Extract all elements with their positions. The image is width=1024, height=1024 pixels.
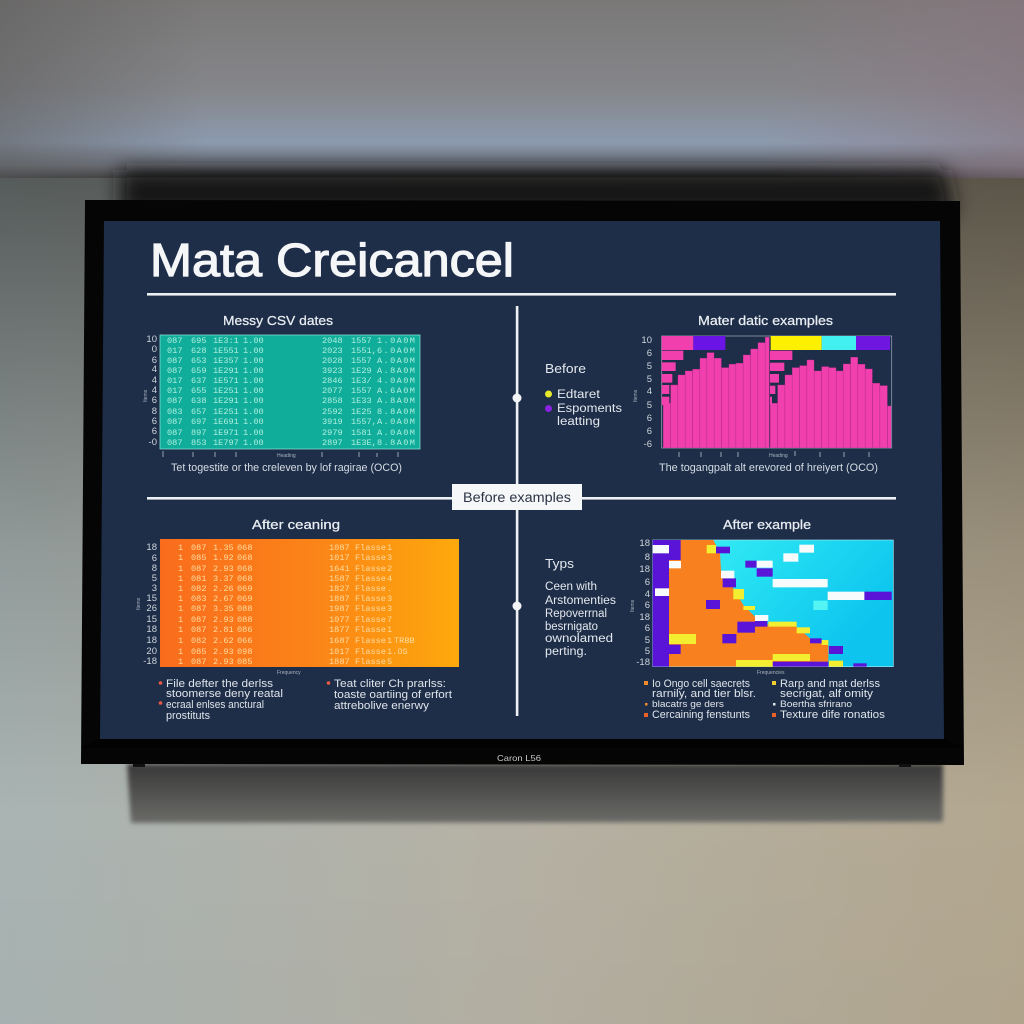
- orange table rows: 2.93: [213, 564, 234, 574]
- orange table rows: .: [387, 584, 392, 594]
- bar chart y axis: Items: [633, 389, 639, 402]
- orange table y axis: Items: [136, 597, 142, 610]
- teal table rows: 1E25: [351, 407, 372, 417]
- types paragraph: Repoverrnal: [545, 608, 607, 620]
- caption: before chart: The togangpalt alt erevored of hreiyert (OCO): [659, 462, 878, 474]
- teal table rows: 087: [167, 417, 182, 427]
- bar chart y axis: 6: [647, 426, 652, 437]
- orange table rows: 1887: [329, 594, 350, 604]
- heatmap y axis: 5: [645, 635, 650, 646]
- orange table rows: 1887: [329, 657, 350, 667]
- bar chart y axis: 6: [647, 348, 652, 359]
- bullets: after cleaning right: [327, 678, 452, 712]
- orange table rows: 3: [387, 594, 392, 604]
- teal table y axis: 6: [152, 426, 157, 437]
- teal table y axis: [143, 334, 157, 448]
- orange table rows: 5: [387, 657, 392, 667]
- ceiling: [0, 0, 1024, 178]
- orange table rows: 1: [178, 574, 183, 584]
- orange table y axis: 18: [146, 635, 157, 646]
- orange table rows: 1077: [329, 615, 350, 625]
- bullets: after example right: Rarp and mat derlss: [780, 678, 881, 690]
- types paragraph: perting.: [545, 646, 587, 658]
- teal table y axis: 4: [152, 364, 157, 375]
- orange table y axis: [136, 542, 157, 667]
- teal table y axis: 4: [152, 375, 157, 386]
- teal table rows: 1E251: [213, 407, 239, 417]
- orange table rows: Flasse: [355, 604, 386, 614]
- teal table rows: 1E971: [213, 428, 239, 438]
- orange table rows: 1.92: [213, 553, 234, 563]
- teal table rows: [167, 336, 416, 448]
- teal table rows: A.0A0M: [377, 417, 416, 427]
- teal table rows: 6.0A0M: [377, 346, 416, 356]
- orange table rows: 1687: [329, 636, 350, 646]
- panel: messy CSV table: [143, 313, 420, 474]
- orange table rows: 1: [178, 553, 183, 563]
- heatmap y axis: 18: [639, 612, 650, 623]
- teal table rows: 4.0A0M: [377, 376, 416, 386]
- monitor bezel: [81, 200, 964, 767]
- orange table rows: Flasse: [355, 564, 386, 574]
- orange table rows: 1: [387, 625, 392, 635]
- caption: messy CSV: Tet togestite or the creleven by lof ragirae (OCO): [171, 462, 402, 474]
- orange table x axis label: Frequency: [277, 670, 301, 676]
- teal table rows: 637: [191, 376, 206, 386]
- teal table background: [160, 335, 420, 449]
- orange table rows: 085: [191, 647, 206, 657]
- teal table rows: 628: [191, 346, 206, 356]
- teal table rows: 3919: [322, 417, 343, 427]
- orange table rows: 2.67: [213, 594, 234, 604]
- orange table rows: 068: [237, 564, 252, 574]
- teal table rows: 2897: [322, 438, 343, 448]
- teal table rows: 1.00: [243, 407, 264, 417]
- teal table rows: 087: [167, 356, 182, 366]
- bullets: after example left: rarnily, and tier blsr.: [652, 688, 756, 700]
- teal table rows: 638: [191, 396, 206, 406]
- heatmap y axis: 6: [645, 600, 650, 611]
- orange table y axis: 15: [146, 593, 157, 604]
- heatmap y axis: 8: [645, 552, 650, 563]
- teal table y axis: 8: [152, 406, 157, 417]
- teal table rows: 657: [191, 407, 206, 417]
- orange table rows: 081: [191, 574, 206, 584]
- bar chart x axis: Heading: [769, 453, 788, 459]
- timeline dot lower: [512, 602, 522, 610]
- types paragraph: [545, 581, 616, 658]
- heatmap y axis: 6: [645, 577, 650, 588]
- panel: before bar chart: [633, 313, 892, 474]
- teal table rows: 1557: [351, 336, 372, 346]
- teal table x axis: Heading: [277, 453, 296, 459]
- screen panel: [100, 221, 944, 739]
- teal table rows: 897: [191, 428, 206, 438]
- teal table rows: 659: [191, 366, 206, 376]
- teal table rows: 1E29: [351, 366, 372, 376]
- orange table rows: 1: [178, 564, 183, 574]
- orange table y axis: 18: [146, 624, 157, 635]
- teal table rows: 697: [191, 417, 206, 427]
- orange table rows: 1: [178, 594, 183, 604]
- teal table rows: 1.00: [243, 346, 264, 356]
- orange table rows: 066: [237, 636, 252, 646]
- bullets: after example left: Cercaining fenstunts: [652, 709, 750, 721]
- teal table y axis: 0: [152, 344, 157, 355]
- title rule: [147, 293, 896, 296]
- types paragraph: Arstomenties: [545, 595, 616, 607]
- heatmap y axis: 5: [645, 646, 650, 657]
- heatmap y axis: 4: [645, 589, 650, 600]
- bullets: after cleaning left: ecraal enlses anctural: [166, 699, 264, 711]
- orange table rows: 1017: [329, 553, 350, 563]
- teal table rows: 087: [167, 336, 182, 346]
- teal table rows: 1E797: [213, 438, 239, 448]
- bar chart y axis: 5: [647, 400, 652, 411]
- teal table rows: 1E691: [213, 417, 239, 427]
- teal table rows: 2979: [322, 428, 343, 438]
- orange table rows: 1: [178, 604, 183, 614]
- teal table rows: 2048: [322, 336, 343, 346]
- types paragraph: Ceen with: [545, 581, 597, 593]
- teal table rows: 1.00: [243, 396, 264, 406]
- orange table rows: 085: [191, 553, 206, 563]
- orange table rows: 1017: [329, 647, 350, 657]
- teal table rows: A.8A0M: [377, 366, 416, 376]
- heatmap y axis: [630, 538, 650, 668]
- bullets: after example right: [772, 678, 886, 721]
- bullets: after example left: blacatrs ge ders: [652, 699, 725, 709]
- orange table y axis: 5: [152, 573, 157, 584]
- teal table rows: 1.00: [243, 428, 264, 438]
- teal table rows: 1.00: [243, 417, 264, 427]
- orange table rows: 088: [237, 604, 252, 614]
- bullets: after cleaning right: Teat cliter Ch prarlss:: [334, 678, 446, 690]
- teal table rows: 2077: [322, 386, 343, 396]
- bullets: after example left: Io Ongo cell saecrets: [652, 678, 750, 690]
- teal table rows: 087: [167, 428, 182, 438]
- panel: after cleaning table: [136, 517, 459, 722]
- teal table rows: 017: [167, 386, 182, 396]
- heatmap y axis: 18: [639, 564, 650, 575]
- teal table rows: 1557: [351, 386, 372, 396]
- orange table rows: 1: [178, 625, 183, 635]
- bullets: after cleaning right: toaste oartiing of erfort: [334, 689, 452, 701]
- orange table rows: 087: [191, 657, 206, 667]
- orange table y axis: 3: [152, 583, 157, 594]
- teal table rows: 1E251: [213, 386, 239, 396]
- heading: before chart: Mater datic examples: [698, 313, 834, 328]
- types paragraph: besrnigato: [545, 621, 598, 633]
- title: Mata Creicancel: [150, 234, 514, 286]
- teal table rows: 1E291: [213, 396, 239, 406]
- teal table rows: 1557,: [351, 417, 377, 427]
- bar chart y axis: 5: [647, 361, 652, 372]
- bullets: after example right: Boertha sfrirano: [780, 699, 852, 709]
- orange table y axis: 20: [146, 646, 157, 657]
- orange table background: [160, 539, 459, 667]
- orange table rows: 1827: [329, 584, 350, 594]
- teal table y axis: 10: [146, 334, 157, 345]
- orange table rows: 087: [191, 615, 206, 625]
- bullets: after example left: [644, 678, 756, 721]
- orange table rows: 3: [387, 553, 392, 563]
- teal table rows: 2858: [322, 396, 343, 406]
- legend item: yellow: Edtaret: [557, 389, 601, 401]
- teal table rows: 1.00: [243, 336, 264, 346]
- orange table rows: 1877: [329, 625, 350, 635]
- teal table rows: 1E33: [351, 396, 372, 406]
- orange table rows: TRBB: [394, 636, 415, 646]
- teal table rows: 083: [167, 407, 182, 417]
- teal table y axis: 6: [152, 395, 157, 406]
- teal table rows: 653: [191, 356, 206, 366]
- teal table rows: 1E291: [213, 366, 239, 376]
- orange table rows: 3.35: [213, 604, 234, 614]
- orange table rows: Flasse: [355, 615, 386, 625]
- teal table rows: 1.00: [243, 376, 264, 386]
- bar chart x axis: [679, 451, 869, 459]
- bullets: after cleaning right: attrebolive enerwy: [334, 700, 430, 712]
- legend item: purple: Espoments: [557, 403, 622, 415]
- teal table rows: 1.0A0M: [377, 336, 416, 346]
- heatmap y axis: -18: [636, 657, 650, 668]
- orange table rows: 068: [237, 543, 252, 553]
- orange table y axis: 15: [146, 614, 157, 625]
- orange table rows: 1.OS: [387, 647, 408, 657]
- teal table rows: 1E551: [213, 346, 239, 356]
- teal table rows: 2592: [322, 407, 343, 417]
- types paragraph: ownolamed: [545, 633, 613, 645]
- teal table rows: 1557: [351, 356, 372, 366]
- orange table rows: 068: [237, 553, 252, 563]
- teal table rows: A.0A0M: [377, 428, 416, 438]
- teal table rows: A.0A0M: [377, 356, 416, 366]
- orange table rows: Flasse: [355, 594, 386, 604]
- orange table rows: Flasse: [355, 553, 386, 563]
- orange table rows: 2: [387, 564, 392, 574]
- orange table rows: 069: [237, 584, 252, 594]
- shadow below screen: [127, 764, 943, 823]
- heatmap y axis: 18: [639, 538, 650, 549]
- heading: messy CSV: Messy CSV dates: [223, 313, 334, 328]
- bullets: after cleaning left: prostituts: [166, 710, 210, 722]
- orange table rows: 087: [191, 625, 206, 635]
- heatmap y axis: Items: [630, 599, 636, 612]
- teal table rows: 1.00: [243, 366, 264, 376]
- orange table rows: 1: [178, 615, 183, 625]
- teal table rows: 1E3/: [351, 376, 372, 386]
- teal table rows: 1.00: [243, 386, 264, 396]
- orange table rows: 1641: [329, 564, 350, 574]
- orange table rows: 087: [191, 564, 206, 574]
- heatmap: [653, 540, 893, 667]
- teal table rows: 1E3E,: [351, 438, 377, 448]
- teal table rows: 087: [167, 438, 182, 448]
- orange table y axis: 26: [146, 603, 157, 614]
- teal table rows: 1581: [351, 428, 372, 438]
- teal table rows: 1.00: [243, 438, 264, 448]
- orange table rows: 1: [178, 543, 183, 553]
- orange table rows: 2.81: [213, 625, 234, 635]
- teal table rows: 2846: [322, 376, 343, 386]
- teal table y axis: 6: [152, 416, 157, 427]
- teal table y axis: 6: [152, 355, 157, 366]
- teal table y axis: 4: [152, 385, 157, 396]
- quadrant dividers: [147, 306, 896, 716]
- bar chart: [662, 336, 892, 448]
- bar chart y axis: 10: [641, 335, 652, 346]
- orange table rows: 1: [178, 647, 183, 657]
- center label: [452, 484, 582, 510]
- orange table rows: Flasse: [355, 625, 386, 635]
- bar chart y axis: -6: [644, 439, 652, 450]
- legend item: purple: leatting: [557, 416, 600, 428]
- teal table rows: 1E571: [213, 376, 239, 386]
- teal table rows: 087: [167, 396, 182, 406]
- orange table rows: 1: [178, 584, 183, 594]
- teal table rows: 853: [191, 438, 206, 448]
- panel: after heatmap: [630, 517, 893, 721]
- heading: types: Typs: [545, 557, 574, 571]
- orange table rows: Flasse: [355, 574, 386, 584]
- teal table rows: 017: [167, 376, 182, 386]
- orange table rows: 7: [387, 615, 392, 625]
- teal table rows: 1E357: [213, 356, 239, 366]
- teal table y axis: Items: [143, 389, 149, 402]
- bar chart y axis: 5: [647, 374, 652, 385]
- bullets: after cleaning left: [159, 678, 283, 722]
- legend item: purple: [545, 403, 622, 428]
- heatmap y axis: 6: [645, 623, 650, 634]
- teal table rows: 8.8A0M: [377, 438, 416, 448]
- orange table rows: 2.93: [213, 647, 234, 657]
- orange table rows: 1987: [329, 604, 350, 614]
- orange table rows: 068: [237, 574, 252, 584]
- orange table rows: Flasse: [355, 657, 386, 667]
- teal table rows: 3923: [322, 366, 343, 376]
- heading: after cleaning: After ceaning: [252, 517, 340, 532]
- orange table rows: Flasse: [355, 636, 386, 646]
- heatmap x axis label: Frequencies: [757, 670, 785, 676]
- orange table rows: 3: [387, 604, 392, 614]
- bar chart y axis: 6: [647, 413, 652, 424]
- teal table rows: 087: [167, 366, 182, 376]
- orange table rows: 1: [178, 636, 183, 646]
- teal table rows: 1E3:1: [213, 336, 239, 346]
- bullets: after example right: Texture dife ronatios: [780, 709, 886, 721]
- orange table rows: 069: [237, 594, 252, 604]
- panel: before legend: [545, 362, 622, 428]
- teal table rows: 655: [191, 386, 206, 396]
- orange table rows: 1.35: [213, 543, 234, 553]
- bullets: after cleaning left: stoomerse deny reatal: [166, 688, 283, 700]
- bar chart y axis: [633, 335, 652, 450]
- orange table y axis: 8: [152, 563, 157, 574]
- orange table y axis: -18: [143, 656, 157, 667]
- teal table x axis: [163, 451, 398, 459]
- orange table rows: 1: [178, 657, 183, 667]
- orange table rows: 1587: [329, 574, 350, 584]
- orange table rows: 2.26: [213, 584, 234, 594]
- orange table rows: Flasse: [355, 647, 386, 657]
- timeline dot upper: [512, 394, 522, 402]
- heading: after example: After example: [723, 517, 811, 532]
- orange table rows: 085: [237, 657, 252, 667]
- orange table rows: 087: [191, 604, 206, 614]
- orange table rows: 3.37: [213, 574, 234, 584]
- orange table rows: 1: [387, 636, 392, 646]
- orange table rows: 082: [191, 584, 206, 594]
- orange table y axis: 18: [146, 542, 157, 553]
- shadow above screen: [120, 170, 955, 215]
- bullets: after cleaning left: File defter the derlss: [166, 678, 274, 690]
- bullets: after example right: secrigat, alf omity: [780, 688, 874, 700]
- teal table rows: A.8A0M: [377, 396, 416, 406]
- orange table rows: 2.62: [213, 636, 234, 646]
- bar chart y axis: 4: [647, 386, 652, 397]
- orange table rows: 083: [191, 594, 206, 604]
- orange table rows: 1087: [329, 543, 350, 553]
- orange table rows: [178, 543, 415, 667]
- orange table rows: 082: [191, 636, 206, 646]
- orange table rows: 086: [237, 625, 252, 635]
- orange table rows: 2.93: [213, 615, 234, 625]
- orange table y axis: 6: [152, 553, 157, 564]
- orange table rows: 087: [191, 543, 206, 553]
- panel: types text: [545, 557, 616, 658]
- center label: Before examples: [463, 490, 571, 505]
- orange table rows: 088: [237, 615, 252, 625]
- orange table rows: Flasse: [355, 543, 386, 553]
- orange table rows: 2.93: [213, 657, 234, 667]
- teal table rows: 2028: [322, 356, 343, 366]
- teal table rows: 8.8A0M: [377, 407, 416, 417]
- teal table rows: 695: [191, 336, 206, 346]
- teal table rows: A.6A0M: [377, 386, 416, 396]
- orange table rows: 1: [387, 543, 392, 553]
- orange table rows: 4: [387, 574, 392, 584]
- teal table y axis: -0: [149, 437, 157, 448]
- teal table rows: 1551,: [351, 346, 377, 356]
- orange table rows: Flasse: [355, 584, 386, 594]
- teal table rows: 017: [167, 346, 182, 356]
- teal table rows: 1.00: [243, 356, 264, 366]
- brand label: Caron L56: [497, 753, 541, 763]
- teal table rows: 2023: [322, 346, 343, 356]
- heading: before: Before: [545, 362, 586, 376]
- orange table rows: 098: [237, 647, 252, 657]
